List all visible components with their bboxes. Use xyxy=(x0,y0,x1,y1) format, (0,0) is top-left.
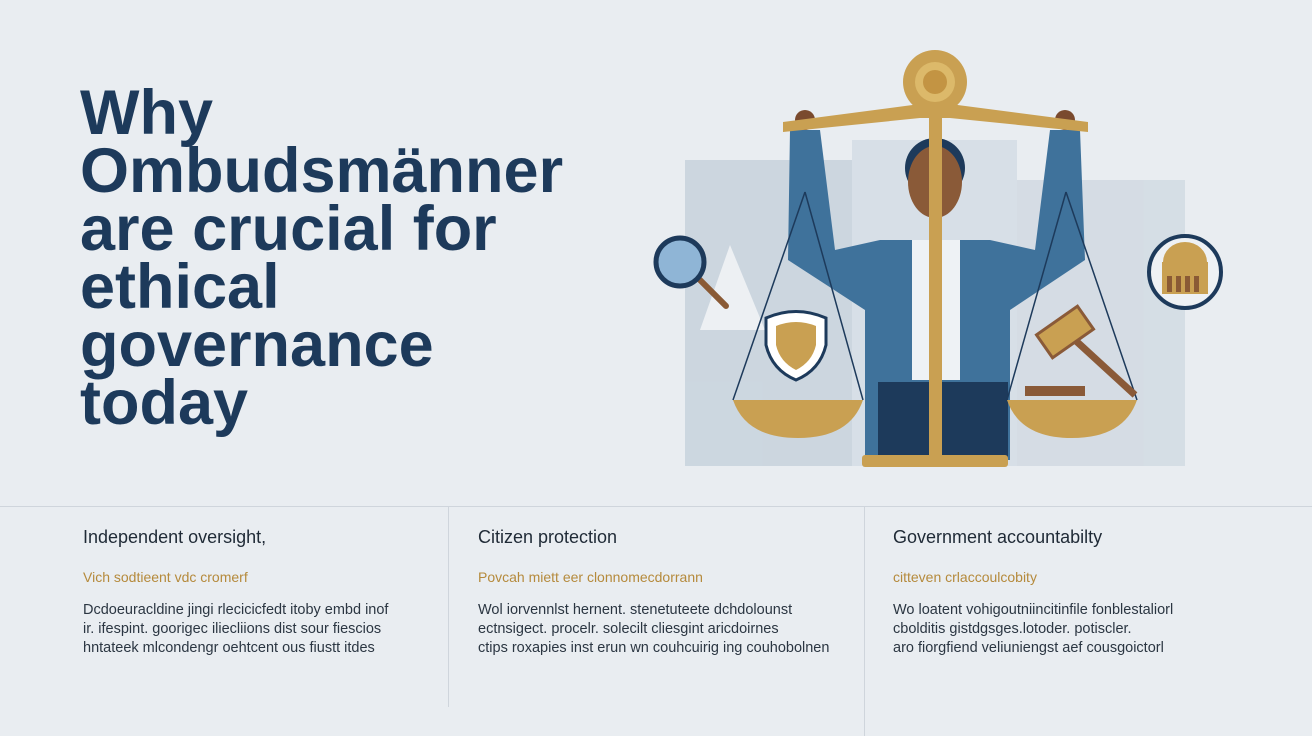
column: independent oversight xyxy=(83,527,388,656)
column: government accountability: cbolditis gistdgsges.lotoder. potiscler. xyxy=(893,621,1132,637)
building icon xyxy=(1149,236,1221,308)
column: government accountability: Wo loatent vohigoutniincitinfile fonblestaliorl xyxy=(893,602,1173,618)
column: government accountability: aro fiorgfiend veliuniengst aef cousgoictorl xyxy=(893,640,1164,656)
column: independent oversight: Vich sodtieent vdc cromerf xyxy=(83,569,248,585)
shield icon xyxy=(766,312,826,380)
illustration: ombudsman with scales xyxy=(654,50,1223,467)
column: citizen protection: ctips roxapies inst erun wn couhcuirig ing couhobolnen xyxy=(478,640,829,656)
column: citizen protection: ectnsigect. procelr. solecilt cliesgint aricdoirnes xyxy=(478,621,779,637)
column: citizen protection: Citizen protection xyxy=(478,527,617,547)
column: government accountability: citteven crlaccoulcobity xyxy=(893,569,1037,585)
column: government accountability: Government accountabilty xyxy=(893,527,1102,547)
title: governance xyxy=(80,310,434,380)
column: independent oversight: Dcdoeuracldine jingi rlecicicfedt itoby embd inof xyxy=(83,602,388,618)
column: citizen protection: Wol iorvennlst hernent. stenetuteete dchdolounst xyxy=(478,602,792,618)
title: Why xyxy=(80,78,213,148)
title: are crucial for xyxy=(80,194,497,264)
title xyxy=(80,78,563,438)
column: citizen protection xyxy=(478,527,829,656)
column: independent oversight: hntateek mlcondengr oehtcent ous fiustt itdes xyxy=(83,640,375,656)
column: citizen protection: Povcah miett eer clonnomecdorrann xyxy=(478,569,703,585)
person xyxy=(788,110,1085,460)
scales xyxy=(733,50,1137,467)
magnifier icon xyxy=(656,238,726,306)
gavel icon xyxy=(1025,306,1135,396)
column: government accountability xyxy=(893,527,1173,656)
column: independent oversight: ir. ifespint. goorigec iliecliions dist sour fiescios xyxy=(83,621,381,637)
title: today xyxy=(80,368,248,438)
title: ethical xyxy=(80,252,280,322)
title: Ombudsmänner xyxy=(80,136,563,206)
column: independent oversight: Independent oversight, xyxy=(83,527,266,547)
divider xyxy=(0,506,1312,507)
